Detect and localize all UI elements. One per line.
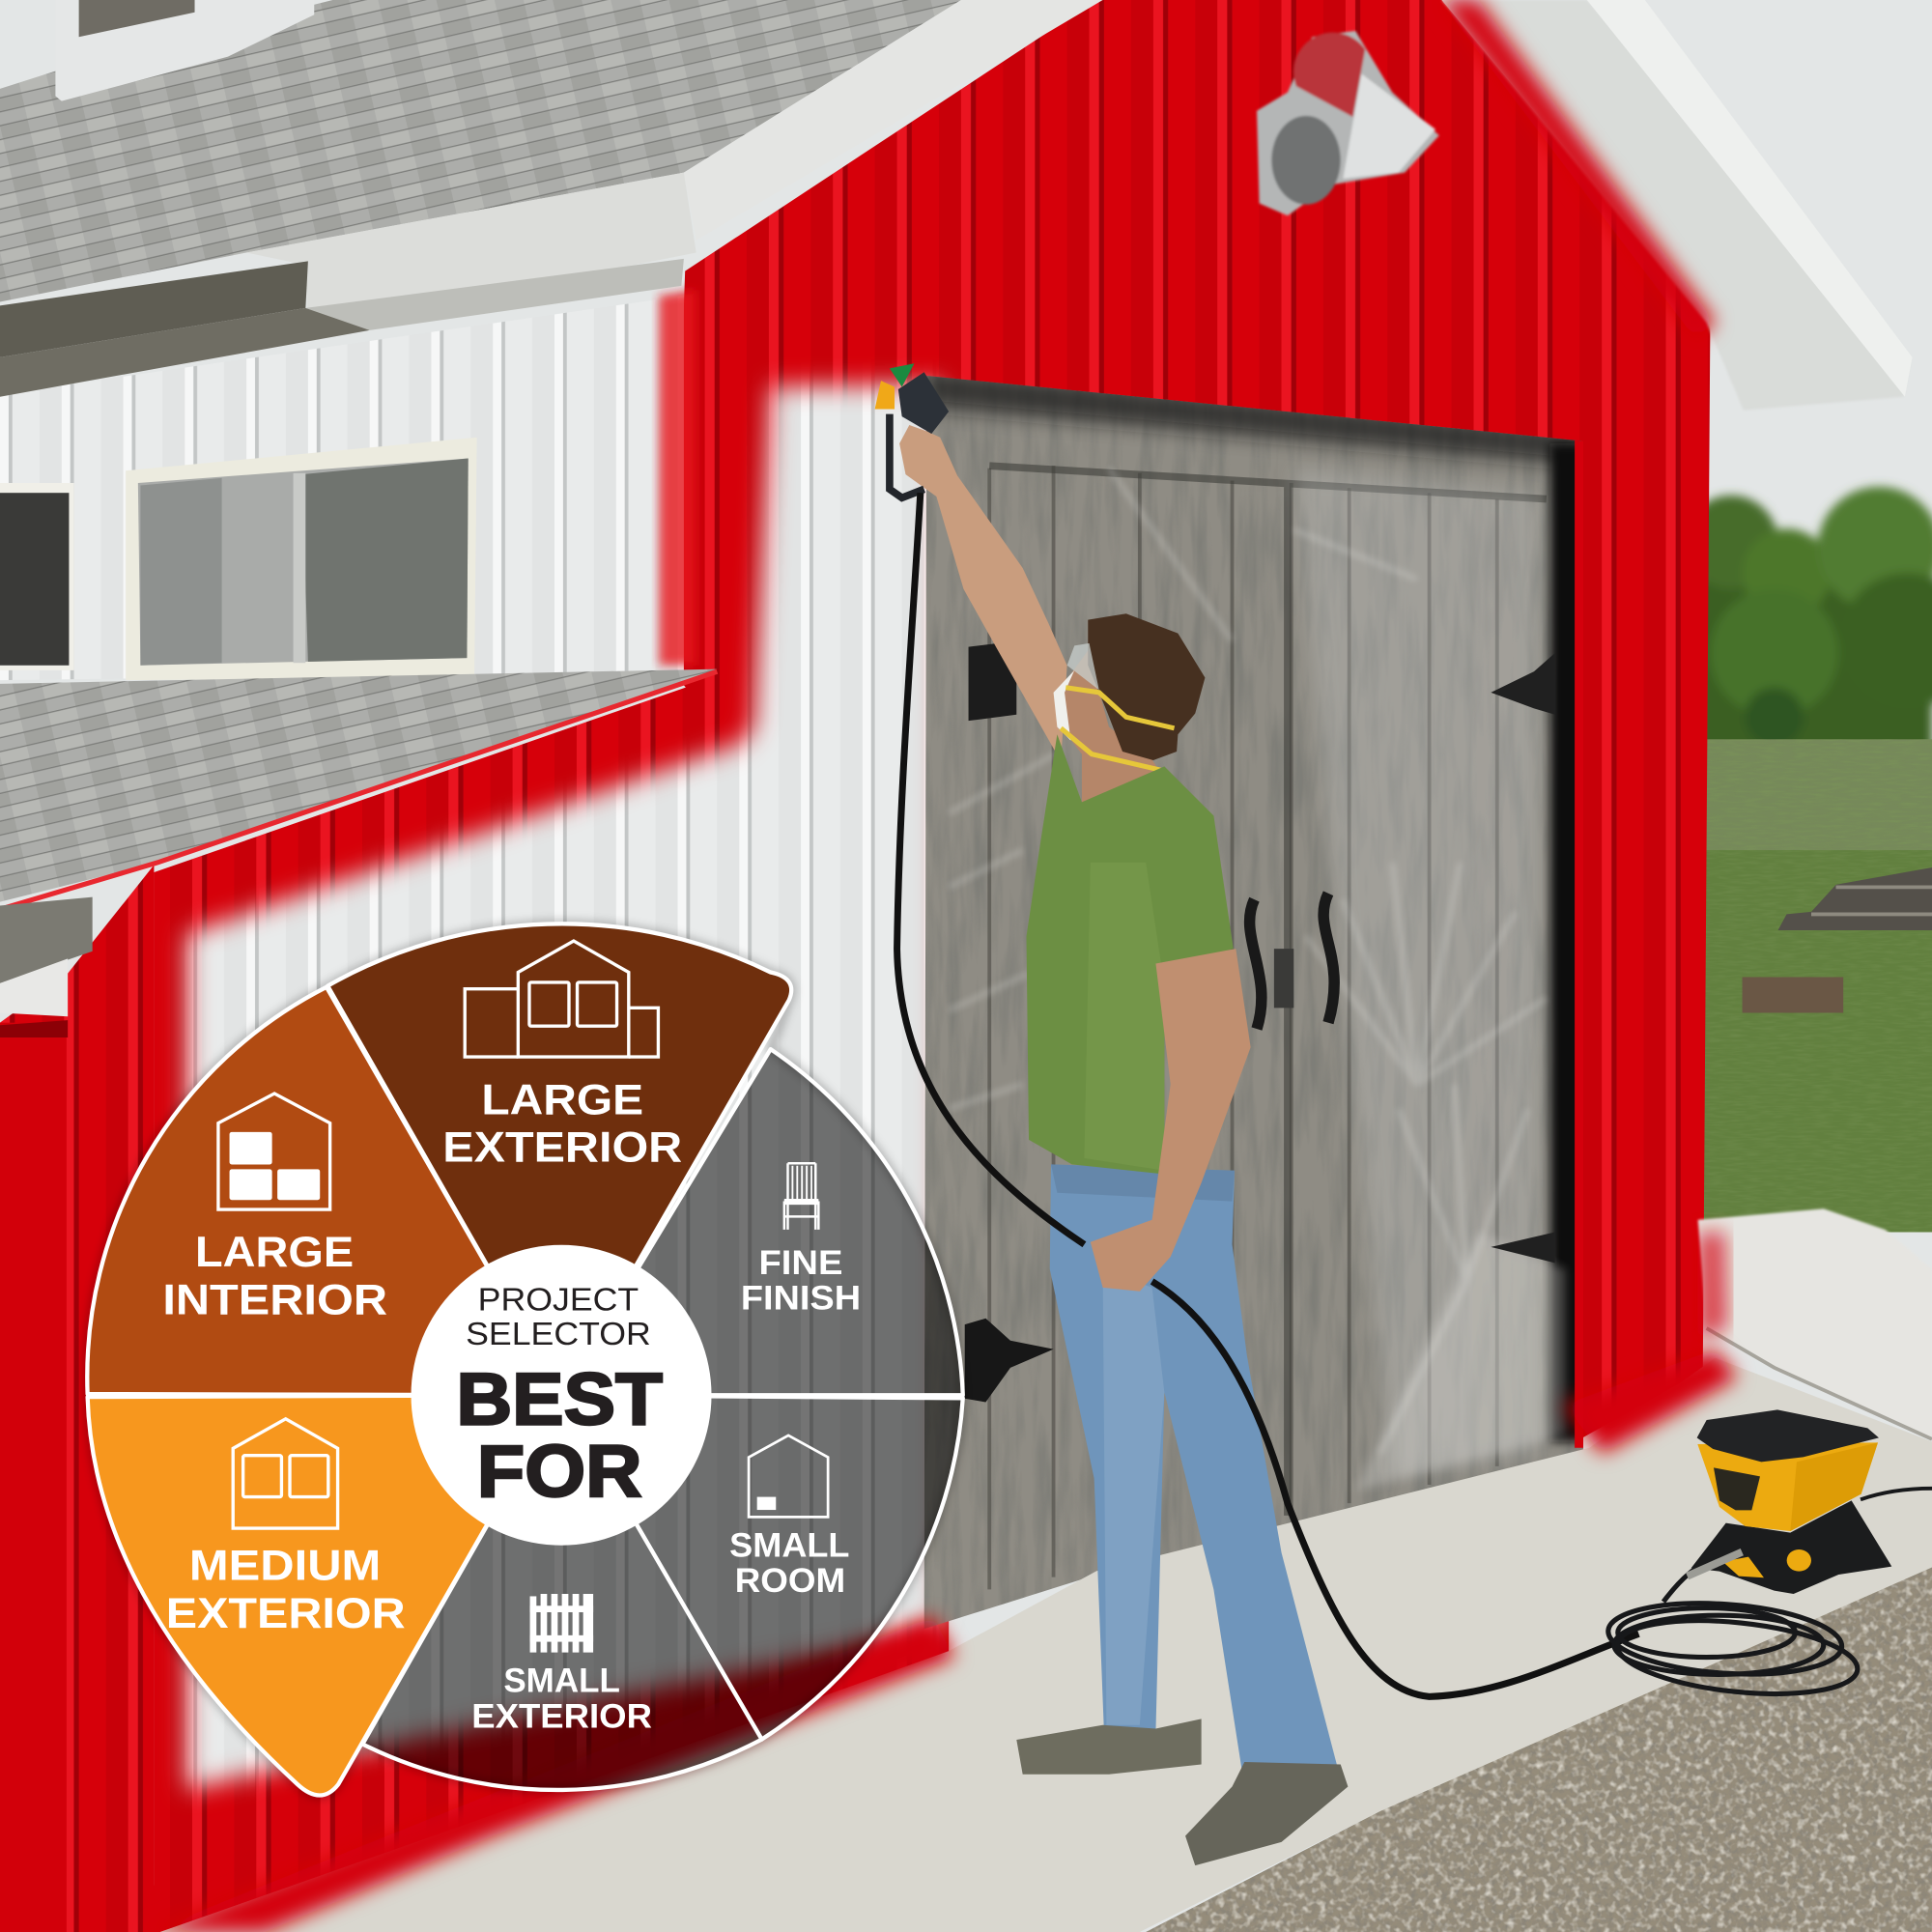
lower-left red wall [0, 671, 949, 1932]
knob and fitting [1787, 1549, 1811, 1572]
white tarp [1698, 1208, 1932, 1439]
label: small room: SMALL [729, 1525, 849, 1564]
dormer [55, 0, 314, 101]
yellow straps [1061, 688, 1175, 770]
pump base [1691, 1500, 1891, 1594]
red gable wall [671, 0, 1710, 1448]
yellow tank [1697, 1442, 1878, 1531]
icon: small room house [749, 1435, 828, 1517]
face and neck [1057, 650, 1164, 804]
label: small exterior [471, 1662, 652, 1735]
icon: house with boxes [218, 1094, 330, 1209]
distant trees [1685, 487, 1932, 752]
man spraying [875, 363, 1348, 1865]
jeans [1050, 1164, 1339, 1786]
hub: best for [412, 1245, 712, 1546]
label: small room: ROOM [735, 1561, 845, 1600]
icon: chair [784, 1163, 818, 1230]
small eave [0, 897, 93, 1016]
power cord [1861, 1489, 1932, 1499]
red bleed on white wall [659, 290, 696, 666]
label: fine finish: FINISH [741, 1279, 861, 1318]
red overspray on cloth [148, 1233, 1737, 1932]
label: medium exterior: MEDIUM [189, 1542, 381, 1589]
label: fine finish [741, 1243, 861, 1318]
logo label [1714, 1467, 1760, 1510]
paint hose [897, 493, 1638, 1696]
segment: small exterior [362, 1395, 762, 1790]
raised arm [899, 425, 1067, 761]
shoes [1016, 1719, 1202, 1775]
lawn [1698, 850, 1932, 1233]
label: fine finish: FINE [759, 1243, 842, 1282]
lid [1697, 1409, 1879, 1462]
gravel ground [1133, 1552, 1932, 1932]
main roof shingles [0, 0, 961, 301]
band window right [126, 438, 477, 680]
hub subtitle: PROJECT [478, 1283, 639, 1319]
hub title [456, 1358, 663, 1513]
label: small room [729, 1525, 849, 1600]
safety goggles [1067, 643, 1099, 690]
hair [1088, 613, 1205, 760]
segment: large exterior [327, 923, 791, 1395]
label: small exterior: EXTERIOR [471, 1696, 652, 1735]
hub subtitle: SELECTOR [466, 1317, 651, 1352]
segment: fine finish [561, 1049, 963, 1395]
label: large exterior: LARGE [481, 1076, 643, 1123]
hose coil [1605, 1555, 1861, 1704]
right roof overhang [1439, 0, 1913, 411]
label: large interior [162, 1229, 387, 1323]
label: large exterior [442, 1076, 682, 1171]
spray gun [875, 363, 949, 497]
plastic folds [949, 469, 1547, 1454]
segment: small room [561, 1395, 963, 1740]
white unpainted siding [166, 363, 956, 1806]
barn door under plastic [918, 367, 1589, 1638]
label: large exterior: EXTERIOR [442, 1123, 682, 1171]
label: small exterior: SMALL [503, 1662, 620, 1700]
label: medium exterior: EXTERIOR [166, 1590, 406, 1637]
icon: medium house [233, 1419, 338, 1528]
lower arm and hand [1091, 949, 1251, 1292]
covered wall light [1257, 31, 1439, 215]
green shirt [1026, 734, 1234, 1175]
upper white wall [0, 296, 684, 680]
segment: large interior [87, 987, 561, 1395]
hub title: BEST [456, 1358, 663, 1440]
wheel: project selector [87, 923, 963, 1795]
drop cloth [160, 1358, 1932, 1932]
label: medium exterior [166, 1542, 406, 1637]
meadow [1698, 739, 1932, 858]
icon: large house [465, 941, 658, 1057]
hub title: FOR [477, 1431, 642, 1513]
segment: medium exterior [88, 1395, 561, 1795]
respirator mask [1054, 670, 1074, 741]
label: large interior: LARGE [195, 1229, 354, 1276]
icon: fence [530, 1594, 593, 1653]
band window left [0, 483, 74, 670]
lower roof [0, 669, 717, 902]
label: large interior: INTERIOR [162, 1276, 387, 1323]
hub subtitle [466, 1283, 651, 1352]
wheel shadow [87, 924, 963, 1795]
plastic-wrapped eave [0, 0, 1103, 397]
paint pump [1688, 1409, 1891, 1594]
